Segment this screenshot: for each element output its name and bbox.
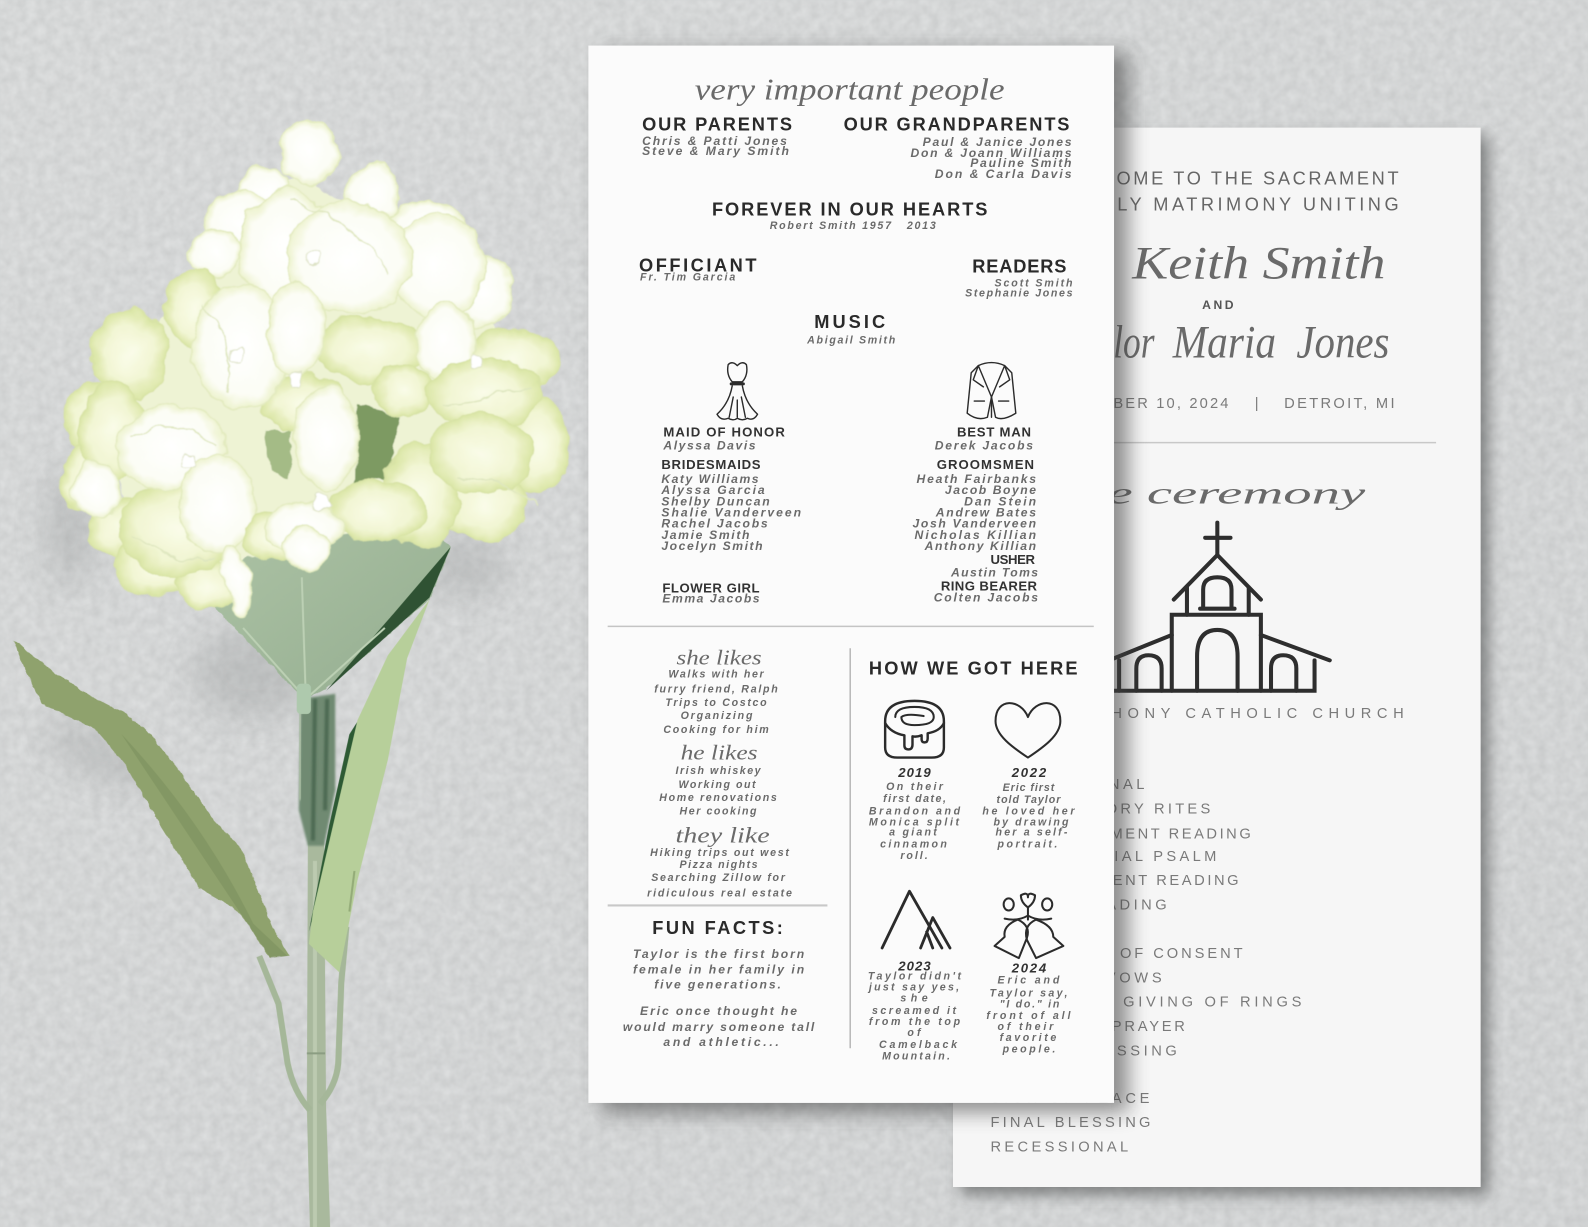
wedding party left column: Alyssa Garcia	[660, 483, 765, 497]
she likes block: Trips to Costco	[665, 697, 767, 709]
2022 milestone: her a self-	[996, 827, 1068, 839]
2023 milestone	[867, 958, 962, 1062]
the ceremony script heading: the ceremony	[1063, 476, 1366, 510]
order of service list: FIRST TESTAMENT READING	[990, 827, 1251, 843]
icon: mountains	[882, 891, 950, 948]
welcome heading	[1042, 168, 1399, 215]
order of service list: INTRODUCTORY RITES	[990, 801, 1210, 817]
2019 milestone: On their	[886, 781, 944, 793]
officiant block: OFFICIANT	[639, 255, 757, 275]
order of service list: NEW TESTAMENT READING	[990, 873, 1239, 889]
our parents block: OUR PARENTS	[642, 115, 792, 135]
readers block: Stephanie Jones	[965, 288, 1073, 300]
2022 milestone	[982, 765, 1075, 851]
2019 milestone: a giant	[889, 827, 937, 839]
she likes block: Organizing	[681, 710, 753, 722]
2022 milestone: by drawing	[994, 816, 1069, 828]
order of service list: MARRIAGE VOWS	[990, 970, 1162, 986]
panel: front card, very important people	[588, 46, 1114, 1103]
date and location	[1040, 396, 1395, 412]
she likes block: Cooking for him	[663, 724, 769, 736]
readers block: READERS	[972, 256, 1066, 276]
how we got here heading: HOW WE GOT HERE	[869, 659, 1078, 679]
they like block: Pizza nights	[680, 859, 758, 871]
wedding party right column: Dan Stein	[964, 494, 1036, 508]
order of service list: GOSPEL READING	[990, 897, 1167, 913]
officiant block: Fr. Tim Garcia	[640, 272, 735, 284]
he likes block	[659, 741, 777, 817]
2022 milestone: portrait.	[997, 839, 1057, 851]
wedding party right column: Nicholas Killian	[915, 528, 1036, 542]
readers block	[965, 256, 1073, 300]
our parents block: Chris & Patti Jones	[642, 134, 787, 148]
our grandparents block: OUR GRANDPARENTS	[844, 115, 1069, 135]
icon: wedding bells	[995, 894, 1063, 958]
bride script name: Maria	[1172, 317, 1276, 369]
2022 milestone: he loved her	[982, 805, 1075, 817]
she likes block: she likes	[677, 645, 762, 669]
our grandparents block	[844, 115, 1072, 181]
wedding party right column: Andrew Bates	[935, 506, 1036, 520]
wedding party right column: RING BEARER	[941, 578, 1038, 593]
right pale leaf	[309, 600, 429, 972]
flower shadow on wall	[37, 466, 506, 800]
they like block: ridiculous real estate	[647, 887, 792, 899]
2023 milestone: 2023	[897, 958, 931, 973]
fun facts block	[623, 918, 815, 1049]
2024 milestone: Taylor say,	[989, 988, 1067, 1000]
date and location: DETROIT, MI	[1284, 396, 1395, 412]
2023 milestone: of	[907, 1027, 922, 1039]
order of service list: THE LORD'S PRAYER	[990, 1019, 1185, 1035]
wedding party left column: Rachel Jacobs	[661, 517, 768, 531]
hydrangea stem and branches	[259, 694, 346, 1227]
2022 milestone: told Taylor	[997, 794, 1061, 806]
they like block	[647, 823, 792, 899]
2023 milestone: Taylor didn't	[868, 970, 962, 982]
petal fold lines	[132, 203, 537, 560]
wedding party left column: Jocelyn Smith	[661, 539, 763, 553]
fun facts block: Taylor is the first born	[633, 947, 804, 961]
icon: cinnamon roll	[885, 701, 944, 758]
wedding party left column: Alyssa Davis	[662, 439, 756, 453]
front card shadow	[602, 53, 1128, 1112]
bride script name	[1063, 317, 1390, 369]
order of service list: RESPONSORIAL PSALM	[990, 849, 1216, 865]
icon: bridesmaid dress	[717, 363, 758, 420]
2019 milestone: Brandon and	[869, 805, 961, 817]
wedding party right column: Josh Vanderveen	[912, 517, 1036, 531]
order of service list: DECLARATION OF CONSENT	[977, 946, 1243, 962]
2022 milestone: 2022	[1011, 765, 1047, 780]
he likes block: Irish whiskey	[676, 765, 762, 777]
groom script name: Eric	[1022, 238, 1103, 290]
forever in our hearts block	[712, 200, 987, 232]
she likes block: furry friend, Ralph	[654, 684, 778, 696]
groom script name: Keith Smith	[1131, 238, 1385, 290]
wedding party left column: Emma Jacobs	[662, 592, 760, 606]
wedding party right column: Colten Jacobs	[934, 591, 1038, 605]
bride script name: Taylor	[1063, 317, 1155, 369]
2019 milestone: first date,	[883, 793, 946, 805]
wedding party right column	[912, 425, 1038, 605]
he likes block: Her cooking	[680, 805, 757, 817]
he likes block: he likes	[681, 741, 758, 765]
icon: suit jacket	[967, 363, 1016, 419]
icon: heart	[996, 703, 1060, 758]
2024 milestone: front of all	[986, 1010, 1072, 1022]
2019 milestone: cinnamon	[880, 839, 947, 851]
date and location: |	[1255, 396, 1259, 412]
welcome heading: OF HOLY MATRIMONY UNITING	[1042, 195, 1399, 215]
order of service list: SIGN OF PEACE	[990, 1091, 1150, 1107]
groom script name	[1022, 238, 1385, 290]
our parents block: Steve & Mary Smith	[642, 144, 789, 158]
wedding party right column: BEST MAN	[957, 425, 1031, 440]
back card shadow	[960, 136, 1489, 1195]
2019 milestone: roll.	[900, 850, 928, 862]
they like block: Searching Zillow for	[651, 872, 786, 884]
wedding party right column: Austin Toms	[950, 565, 1038, 579]
2023 milestone: she	[900, 993, 928, 1005]
order of service list	[963, 777, 1302, 1156]
they like block: Hiking trips out west	[650, 847, 789, 859]
order of service list: RECESSIONAL	[990, 1140, 1128, 1156]
2023 milestone: just say yes,	[867, 982, 959, 994]
she likes block	[654, 645, 778, 736]
wedding party right column: USHER	[990, 552, 1036, 567]
fun facts block: and athletic...	[663, 1035, 779, 1049]
2024 milestone: Eric and	[998, 974, 1060, 986]
panel: back card, ceremony program	[953, 128, 1481, 1187]
our grandparents block: Pauline Smith	[970, 156, 1071, 170]
2023 milestone: Camelback	[879, 1039, 958, 1051]
church name: ST. ANTHONY CATHOLIC CHURCH	[1019, 706, 1404, 722]
2024 milestone: of their	[998, 1021, 1054, 1033]
our grandparents block: Paul & Janice Jones	[923, 135, 1072, 149]
wedding party left column: BRIDESMAIDS	[661, 457, 761, 472]
bride script name: Jones	[1296, 317, 1390, 369]
order of service list: NUPTIAL BLESSING	[984, 1043, 1177, 1059]
and label: AND	[1202, 298, 1234, 312]
2019 milestone: 2019	[897, 765, 931, 780]
forever in our hearts block: Robert Smith 1957 2013	[770, 220, 936, 232]
2023 milestone: from the top	[869, 1016, 961, 1028]
very important people script heading: very important people	[695, 72, 1005, 106]
hydrangea bloom	[62, 120, 569, 618]
wedding party left column: Katy Williams	[661, 472, 759, 486]
our parents block	[642, 115, 792, 158]
2023 milestone: Mountain.	[882, 1050, 950, 1062]
wedding party right column: Anthony Killian	[924, 539, 1036, 553]
order of service list: FINAL BLESSING	[990, 1115, 1150, 1131]
floret centres	[182, 253, 484, 508]
she likes block: Walks with her	[668, 669, 764, 681]
fun facts block: Eric once thought he	[640, 1004, 797, 1018]
2023 milestone: screamed it	[872, 1005, 956, 1017]
2024 milestone: 2024	[1011, 960, 1047, 975]
fun facts block: FUN FACTS:	[652, 918, 783, 938]
wedding party right column: GROOMSMEN	[937, 457, 1034, 472]
readers block: Scott Smith	[995, 278, 1073, 290]
2024 milestone: people.	[1002, 1043, 1055, 1055]
2024 milestone: "I do." in	[1000, 999, 1060, 1011]
music block: Abigail Smith	[806, 334, 896, 346]
they like block: they like	[676, 823, 770, 848]
yellow back petals	[62, 310, 569, 610]
2022 milestone: Eric first	[1003, 782, 1055, 794]
wedding party left column: Shalie Vanderveen	[661, 506, 801, 520]
2024 milestone	[986, 960, 1072, 1055]
wedding party left column: MAID OF HONOR	[663, 425, 785, 440]
wedding party right column: Jacob Boyne	[945, 483, 1036, 497]
music block: MUSIC	[814, 312, 885, 332]
order of service list: PROCESSIONAL	[990, 777, 1144, 793]
fun facts block: female in her family in	[633, 962, 804, 976]
welcome heading: WELCOME TO THE SACRAMENT	[1053, 168, 1399, 188]
2019 milestone	[869, 765, 961, 862]
he likes block: Home renovations	[659, 792, 777, 804]
large sage leaf below bloom	[207, 506, 451, 714]
icon: church	[1109, 523, 1330, 691]
forever in our hearts block: FOREVER IN OUR HEARTS	[712, 200, 987, 220]
fun facts block: would marry someone tall	[623, 1020, 815, 1034]
wedding party left column: Shelby Duncan	[661, 494, 770, 508]
our grandparents block: Don & Joann Williams	[910, 146, 1072, 160]
he likes block: Working out	[679, 779, 756, 791]
wedding party left column: Jamie Smith	[661, 528, 749, 542]
left serrated leaf	[13, 640, 290, 958]
wedding party right column: Heath Fairbanks	[917, 472, 1036, 486]
2019 milestone: Monica split	[869, 816, 960, 828]
our grandparents block: Don & Carla Davis	[935, 167, 1072, 181]
wedding party right column: Derek Jacobs	[935, 439, 1033, 453]
wedding party left column: FLOWER GIRL	[662, 580, 760, 595]
wedding party left column	[660, 425, 801, 606]
left leaf midrib and fold	[122, 734, 288, 958]
order of service list: BLESSING AND GIVING OF RINGS	[963, 995, 1302, 1011]
fun facts block: five generations.	[654, 977, 781, 991]
white lower petals	[74, 382, 425, 618]
date and location: SEPTEMBER 10, 2024	[1040, 396, 1228, 412]
music block	[806, 312, 896, 346]
white upper petals	[164, 120, 541, 494]
2024 milestone: favorite	[1000, 1032, 1056, 1044]
